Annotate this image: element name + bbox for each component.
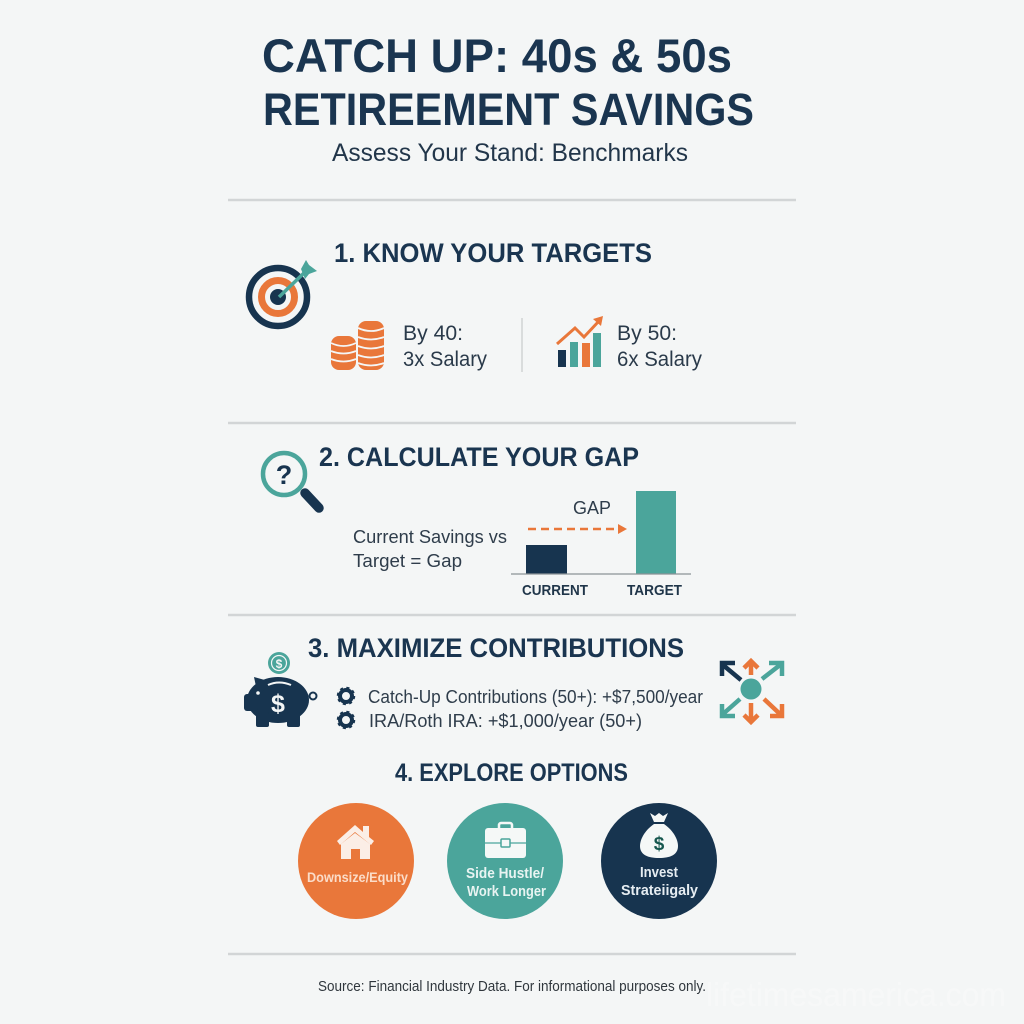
source note: Source: Financial Industry Data. For informational purposes only.	[318, 979, 706, 995]
icon: radiating arrows	[722, 661, 782, 722]
option: downsize/equity: Downsize/Equity	[307, 869, 408, 885]
bar chart: current vs target	[511, 491, 691, 599]
bar chart: current vs target: CURRENT	[522, 582, 588, 599]
text: gap formula: Target = Gap	[353, 550, 462, 571]
option: invest strategically: Strateiigaly	[621, 882, 699, 899]
option: side hustle / work longer	[447, 803, 563, 919]
heading: know your targets: 1. KNOW YOUR TARGETS	[334, 238, 652, 268]
panel: explore options	[298, 759, 717, 919]
icon: target with arrow	[249, 260, 317, 326]
title: CATCH UP: 40s & 50s	[262, 29, 732, 82]
text: by 40: 3x Salary	[403, 347, 487, 371]
bar chart: current vs target: TARGET	[627, 582, 682, 599]
icon: magnifying glass with question mark	[263, 453, 319, 508]
option: downsize/equity	[298, 803, 414, 919]
option: side hustle / work longer: Work Longer	[467, 883, 546, 900]
heading: calculate your gap: 2. CALCULATE YOUR GAP	[319, 442, 639, 472]
icon: piggy bank with coin: $	[271, 690, 285, 718]
icon: growth bar chart	[557, 316, 603, 367]
panel: know your targets	[249, 238, 702, 372]
icon: magnifying glass with question mark: ?	[276, 460, 292, 490]
option: invest strategically: $	[654, 834, 665, 855]
text: by 50: By 50:	[617, 321, 677, 345]
icon: piggy bank with coin: $	[276, 657, 283, 671]
icon: gear 2	[338, 712, 354, 728]
text: by 40: By 40:	[403, 321, 463, 345]
heading: explore options: 4. EXPLORE OPTIONS	[395, 759, 628, 787]
bar chart: current vs target: GAP	[573, 498, 611, 518]
text: by 40	[403, 321, 487, 371]
option: side hustle / work longer: Side Hustle/	[466, 865, 545, 882]
text: gap formula	[353, 526, 507, 571]
text: gap formula: Current Savings vs	[353, 526, 507, 547]
icon: gear 1	[338, 688, 354, 704]
watermark: lifetimesamerica.com	[706, 976, 1006, 1013]
icon: piggy bank with coin	[244, 652, 316, 727]
option: invest strategically: Invest	[640, 864, 678, 881]
title: RETIREEMENT SAVINGS	[263, 84, 754, 135]
option: invest strategically	[601, 803, 717, 919]
text: by 50	[617, 321, 702, 371]
text: by 50: 6x Salary	[617, 347, 702, 371]
subtitle: Assess Your Stand: Benchmarks	[332, 139, 688, 167]
panel: maximize contributions	[244, 633, 782, 731]
text: ira contributions: IRA/Roth IRA: +$1,000/year (50+)	[369, 710, 642, 731]
title	[262, 29, 754, 135]
heading: maximize contributions: 3. MAXIMIZE CONTRIBUTIONS	[308, 633, 684, 663]
panel: calculate your gap	[263, 442, 691, 599]
icon: coin stacks	[331, 321, 384, 370]
text: catch-up contributions: Catch-Up Contributions (50+): +$7,500/year	[368, 686, 703, 707]
